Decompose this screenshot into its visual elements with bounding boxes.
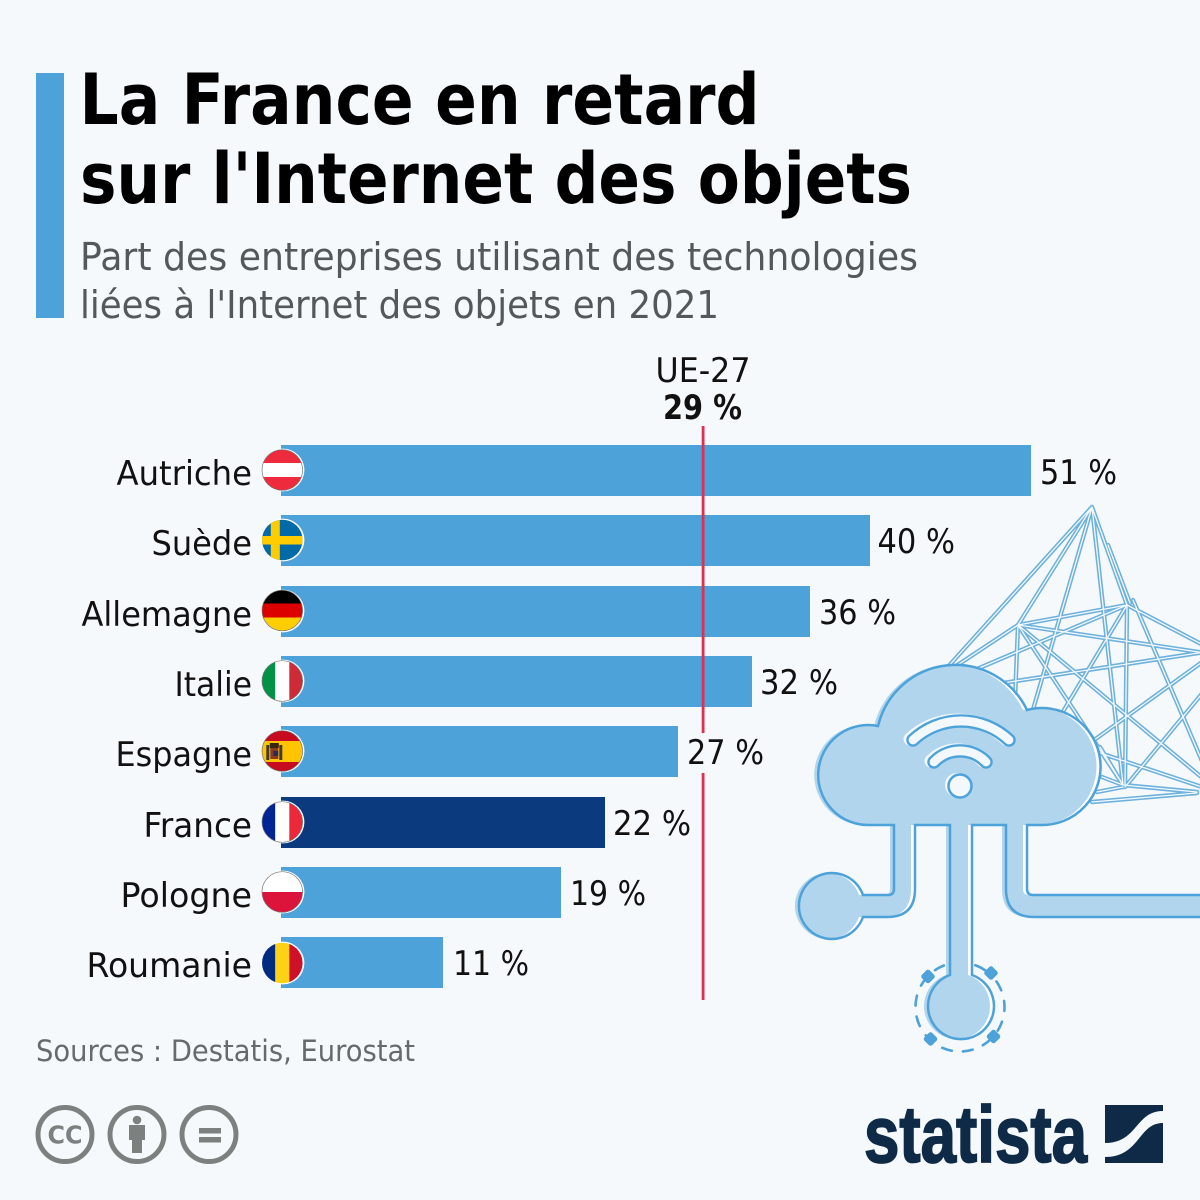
row: Autriche <box>116 445 1117 496</box>
icon: creative commons attribution <box>110 1108 164 1162</box>
row: Italie <box>174 656 838 707</box>
title: sur l'Internet des objets <box>80 138 912 220</box>
bar chart <box>82 445 1117 988</box>
row: Allemagne: Allemagne <box>82 595 252 634</box>
row: Suède: 40 % <box>878 522 955 561</box>
row: Suède <box>152 515 955 566</box>
row: Allemagne <box>82 586 896 637</box>
reference label: UE-27 29 % <box>656 351 750 427</box>
icon: creative commons CC <box>38 1108 92 1162</box>
row: France: 22 % <box>613 804 691 843</box>
row: Roumanie <box>86 937 529 988</box>
row: Roumanie: 11 % <box>453 944 529 983</box>
row: Allemagne: 36 % <box>819 593 896 632</box>
logo: statista square mark <box>1105 1105 1163 1163</box>
row: Pologne <box>120 867 646 918</box>
row: Espagne: 27 % <box>687 733 764 772</box>
source: Sources : Destatis, Eurostat <box>36 1034 415 1068</box>
row: Italie: 32 % <box>760 663 838 702</box>
logo: statista wordmark: statista <box>864 1090 1087 1179</box>
icon: creative commons no derivatives <box>182 1108 236 1162</box>
reference line: EU-27 average <box>702 426 704 1000</box>
title: La France en retard <box>80 59 760 141</box>
icon: wifi symbol <box>910 720 1009 798</box>
subtitle <box>80 235 918 327</box>
row: Autriche: 51 % <box>1040 453 1117 492</box>
row: France <box>144 797 691 848</box>
row: Espagne: Espagne <box>116 735 252 774</box>
row: Suède: Suède <box>152 524 252 563</box>
illustration: network mesh <box>900 507 1200 802</box>
subtitle: liées à l'Internet des objets en 2021 <box>80 283 719 327</box>
row: Roumanie: Roumanie <box>86 946 252 985</box>
subtitle: Part des entreprises utilisant des technologies <box>80 235 918 279</box>
icon: creative commons CC: CC <box>48 1120 82 1150</box>
reference label: UE-27 29 %: 29 % <box>663 388 742 427</box>
accent bar <box>36 73 64 318</box>
row: Pologne: 19 % <box>570 874 646 913</box>
row: France: France <box>144 806 252 845</box>
title <box>80 59 912 220</box>
row: Italie: Italie <box>174 665 252 704</box>
row: Pologne: Pologne <box>120 876 252 915</box>
row: Espagne <box>116 726 764 777</box>
row: Autriche: Autriche <box>116 454 252 493</box>
illustration: dashed ring and nodes <box>900 947 1020 1067</box>
reference label: UE-27 29 %: UE-27 <box>656 351 750 390</box>
illustration: cloud with circuit connectors <box>795 665 1200 1039</box>
